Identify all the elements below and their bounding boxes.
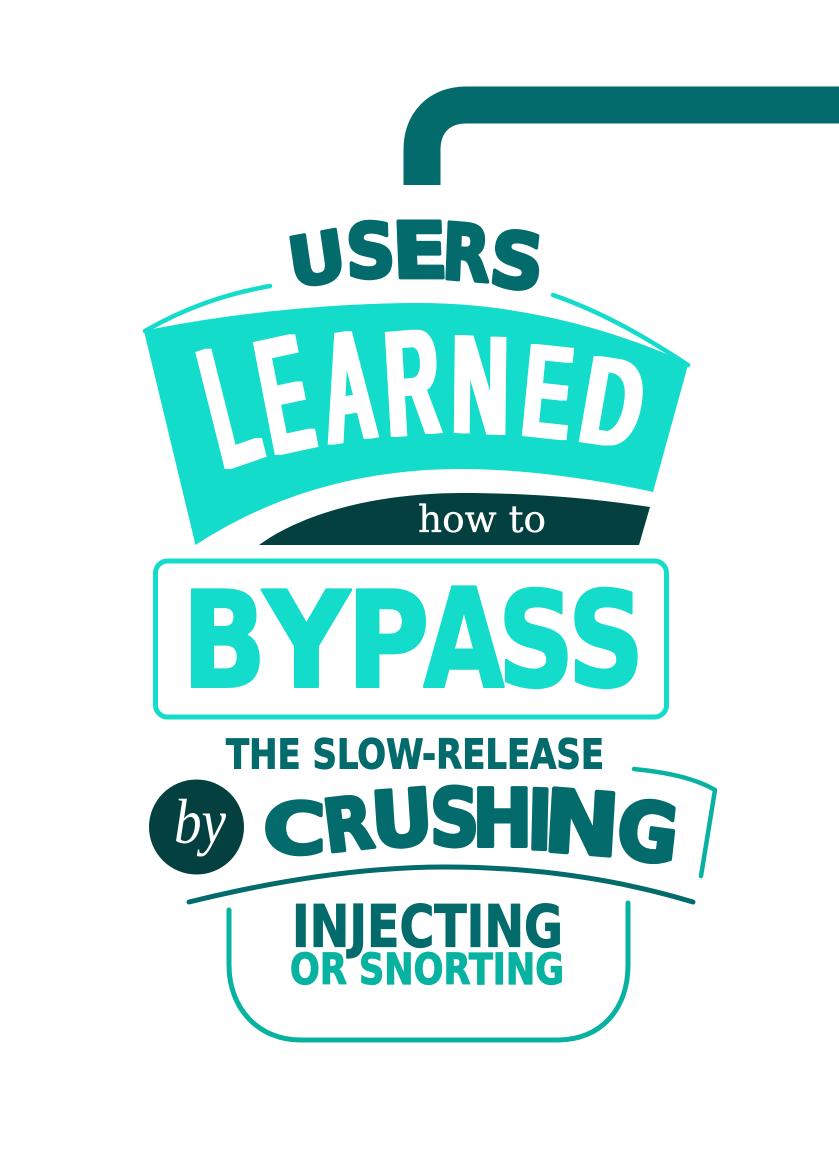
heading: BYPASS: S xyxy=(498,565,574,718)
heading: LEARNED: N xyxy=(451,305,509,466)
heading: USERS: S xyxy=(486,214,548,309)
heading: USERS: E xyxy=(391,206,449,296)
heading: USERS: R xyxy=(440,207,492,301)
text: THE SLOW-RELEASE: THE SLOW-RELEASE xyxy=(226,730,604,778)
decorative banner line: right xyxy=(553,295,688,365)
heading: CRUSHING xyxy=(263,771,683,884)
decorative arc line xyxy=(189,867,693,902)
panel: bottom container xyxy=(229,903,628,1040)
panel: teal banner xyxy=(144,303,688,545)
text: how to: how to xyxy=(418,498,546,541)
heading: CRUSHING: S xyxy=(430,773,479,864)
heading: USERS: S xyxy=(345,208,397,297)
heading: LEARNED: D xyxy=(572,328,654,477)
heading: LEARNED xyxy=(184,294,654,507)
icon: by badge xyxy=(149,780,244,874)
heading: BYPASS: Y xyxy=(261,563,351,718)
heading: BYPASS: S xyxy=(568,565,644,718)
heading: LEARNED: E xyxy=(517,314,578,469)
heading: USERS xyxy=(283,206,548,309)
heading: CRUSHING: R xyxy=(319,781,378,870)
heading: LEARNED: E xyxy=(245,299,325,492)
heading: CRUSHING: G xyxy=(612,783,683,884)
heading: CRUSHING: U xyxy=(368,773,436,867)
heading: CRUSHING: H xyxy=(472,773,533,865)
heading: LEARNED: R xyxy=(381,297,444,471)
heading: USERS: U xyxy=(283,216,351,305)
decorative corner line xyxy=(634,769,715,876)
heading: BYPASS xyxy=(182,560,644,719)
icon: by badge: by xyxy=(174,786,227,857)
heading: BYPASS: A xyxy=(424,560,504,719)
heading: BYPASS: P xyxy=(347,564,430,719)
panel: BYPASS box xyxy=(156,561,666,717)
decorative banner line: left xyxy=(145,286,270,331)
heading: BYPASS: B xyxy=(182,563,266,718)
heading: LEARNED: A xyxy=(315,294,381,479)
text: INJECTING: INJECTING xyxy=(292,892,563,960)
heading: LEARNED: L xyxy=(184,302,275,507)
heading: CRUSHING: I xyxy=(526,773,553,869)
panel: dark ribbon xyxy=(259,493,650,545)
heading: CRUSHING: N xyxy=(541,771,622,877)
icon: pipe xyxy=(422,105,839,185)
text: OR SNORTING: OR SNORTING xyxy=(290,945,564,995)
heading: CRUSHING: C xyxy=(263,789,326,870)
